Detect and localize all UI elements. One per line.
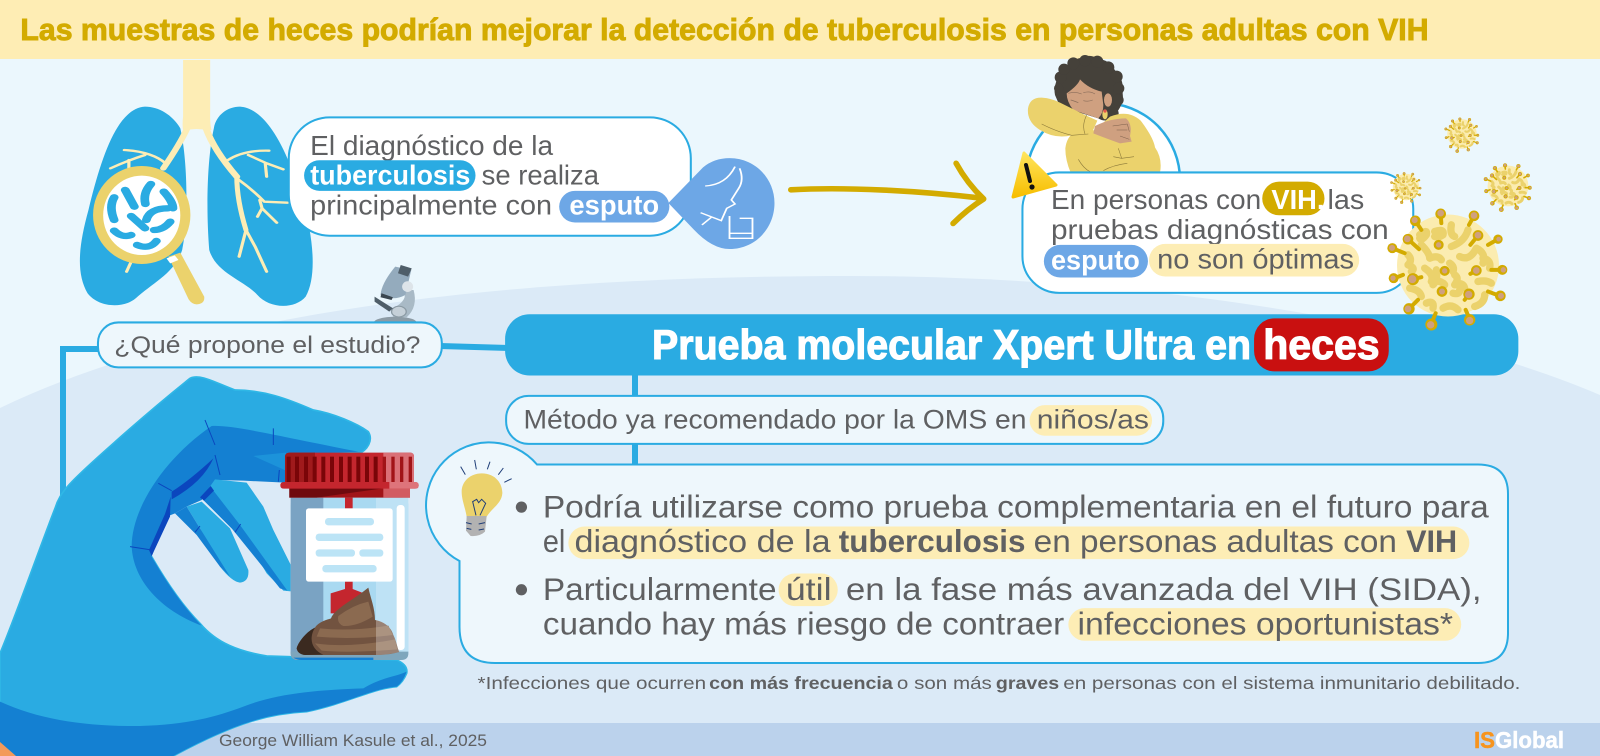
stool sample (297, 588, 399, 655)
highlight: no son optimas (1149, 244, 1359, 277)
bubble (1022, 172, 1413, 293)
highlight: VIH (1262, 182, 1324, 215)
highlight text no son optimas: no son óptimas (1157, 243, 1354, 274)
headline banner (505, 314, 1518, 376)
middle finger (175, 502, 248, 583)
highlight line 2 (568, 527, 1469, 559)
bullet 2 line 2: infecciones oportunistas* (1078, 606, 1453, 642)
eyes (1068, 92, 1095, 103)
bullet 1 line 2: el (543, 523, 565, 559)
illustration: coughing woman (1028, 55, 1161, 173)
bullet 2 line 2 (543, 606, 1453, 642)
bubble (289, 117, 691, 236)
icon: large virus (1387, 209, 1507, 330)
footnote: con más frecuencia (709, 673, 893, 693)
text las: las (1328, 184, 1364, 215)
highlight: heces (1254, 318, 1389, 371)
glove shadow, wrist (0, 672, 407, 756)
icon: warning triangle (1013, 153, 1056, 197)
highlight text heces: heces (1263, 321, 1380, 368)
illustration: arch frame behind woman (1026, 103, 1180, 257)
headline text: Prueba molecular Xpert Ultra en (652, 321, 1251, 368)
highlight: tuberculosis (304, 160, 476, 191)
bullet 1 line 2 (543, 523, 1457, 559)
highlight: niños/as (1030, 405, 1152, 436)
face (1067, 79, 1103, 118)
bullet 2 line 1 (543, 571, 1482, 607)
text line 1: El diagnóstico de la (310, 130, 554, 161)
footnote: o son más (897, 673, 992, 693)
method pill (506, 396, 1163, 444)
jar body (291, 498, 408, 660)
panel: problem bubble (1022, 172, 1413, 293)
text line 1: En personas con (1051, 184, 1261, 215)
panel: conclusions (426, 442, 1508, 663)
text line 2: se realiza (482, 160, 600, 191)
illustration: arrow between problems (791, 163, 984, 223)
glove crease lines (130, 420, 279, 550)
text line 3: principalmente con (310, 189, 552, 220)
bullet 1 line 1: Podría utilizarse como prueba complementaria en el futuro para (543, 488, 1489, 524)
glove highlight between fingers (253, 453, 286, 471)
title: Las muestras de heces podrían mejorar la detección de tuberculosis en personas adultas con VIH (20, 13, 1429, 47)
logo: ISGlobal: IS (1474, 727, 1495, 753)
highlight text tuberculosis: tuberculosis (310, 160, 470, 191)
magnifier (93, 166, 204, 304)
glove shadow, palm (132, 426, 358, 626)
jar lid (280, 453, 419, 498)
panel outline (426, 442, 1508, 663)
highlight: esputo (559, 191, 669, 222)
background curve (0, 276, 1600, 756)
body (1065, 114, 1161, 173)
highlight util (779, 573, 838, 606)
logo: ISGlobal: Global (1495, 727, 1564, 753)
highlight text niños/as: niños/as (1037, 405, 1149, 435)
bullet 2 line 1: Particularmente (543, 571, 777, 607)
earring (1102, 109, 1108, 119)
method text: Método ya recomendado por la OMS en (523, 405, 1027, 435)
jar label stem and spoon (331, 498, 364, 613)
icon: light bulb (461, 460, 512, 536)
title band (0, 0, 1600, 59)
highlight text esputo: esputo (1051, 244, 1140, 275)
illustration: connector lines (63, 346, 635, 495)
icon: microscope (374, 265, 416, 322)
raised sleeve (1028, 98, 1097, 137)
ring finger (202, 479, 298, 592)
highlight: esputo (1044, 245, 1148, 278)
highlight text esputo: esputo (569, 189, 659, 220)
source citation: George William Kasule et al., 2025 (219, 731, 487, 750)
hair (1054, 55, 1124, 121)
highlight text VIH: VIH, (1271, 184, 1324, 215)
left lung (80, 107, 186, 305)
right lung (207, 107, 313, 306)
footnote: graves (996, 673, 1059, 693)
question pill: ¿Qué propone el estudio? (114, 332, 420, 359)
bullet 2 line 1: útil (786, 571, 832, 607)
icon: esputo sample face (701, 167, 752, 238)
glove creases (149, 458, 214, 556)
text line 2: pruebas diagnósticas con (1051, 214, 1389, 245)
panel: diagnosis bubble (289, 117, 774, 249)
icon: small virus top (1444, 117, 1479, 153)
bullet 2 (516, 584, 527, 595)
hand detail (1113, 124, 1129, 139)
clothing lines (1042, 115, 1134, 172)
footer bar (0, 723, 1600, 756)
ear (1104, 93, 1112, 107)
highlight infecciones (1068, 608, 1461, 641)
bullet 1 line 2: tuberculosis (839, 523, 1026, 559)
footnote: en personas con el sistema inmunitario debilitado. (1063, 673, 1520, 693)
illustration: lungs with magnifier (80, 60, 313, 306)
jar label (306, 508, 393, 582)
footnote (478, 673, 1520, 693)
illustration: bottom-left sleeve corner (0, 742, 16, 756)
bullet 1 (516, 502, 527, 513)
bullet 2 line 1: en la fase más avanzada del VIH (SIDA), (846, 571, 1482, 607)
bullet 2 line 2: cuando hay más riesgo de contraer (543, 606, 1064, 642)
glove (0, 377, 407, 756)
trachea and bronchi (111, 60, 287, 272)
icon: small virus near bubble (1390, 172, 1421, 204)
hand (1093, 118, 1132, 143)
speech tail with esputo circle (668, 158, 774, 249)
bullet 1 line 2: en personas adultas con (1034, 523, 1397, 559)
question pill (98, 322, 442, 367)
bullet 1 line 2: diagnóstico de la (574, 523, 831, 559)
bullet 1 line 2: VIH (1406, 523, 1457, 559)
illustration: gloved hand holding stool sample jar (0, 377, 419, 756)
footnote: *Infecciones que ocurren (478, 673, 706, 693)
icon: medium virus (1484, 163, 1532, 212)
